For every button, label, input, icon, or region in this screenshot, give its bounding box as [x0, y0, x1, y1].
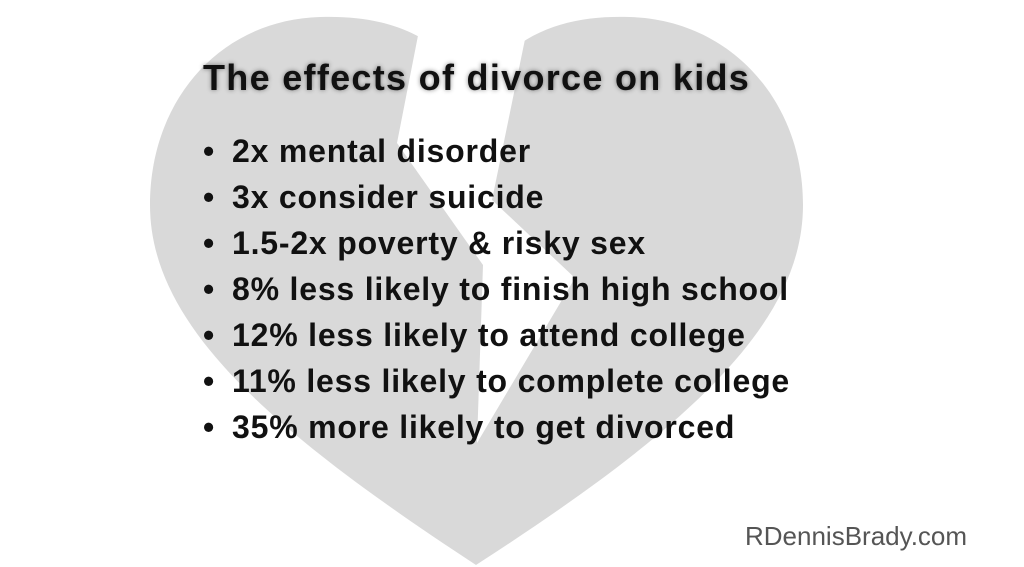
bullet list: 2x mental disorder	[232, 133, 531, 169]
bullet list: 3x consider suicide	[232, 179, 544, 215]
bullet list: 12% less likely to attend college	[232, 317, 746, 353]
bullet list: 8% less likely to finish high school	[232, 271, 789, 307]
bullet list: 35% more likely to get divorced	[232, 409, 735, 445]
bullet list: 11% less likely to complete college	[232, 363, 790, 399]
footer website: RDennisBrady.com	[745, 521, 967, 551]
bullet list: 1.5-2x poverty & risky sex	[232, 225, 646, 261]
title: The effects of divorce on kids	[203, 57, 750, 98]
bullet list	[204, 133, 790, 445]
